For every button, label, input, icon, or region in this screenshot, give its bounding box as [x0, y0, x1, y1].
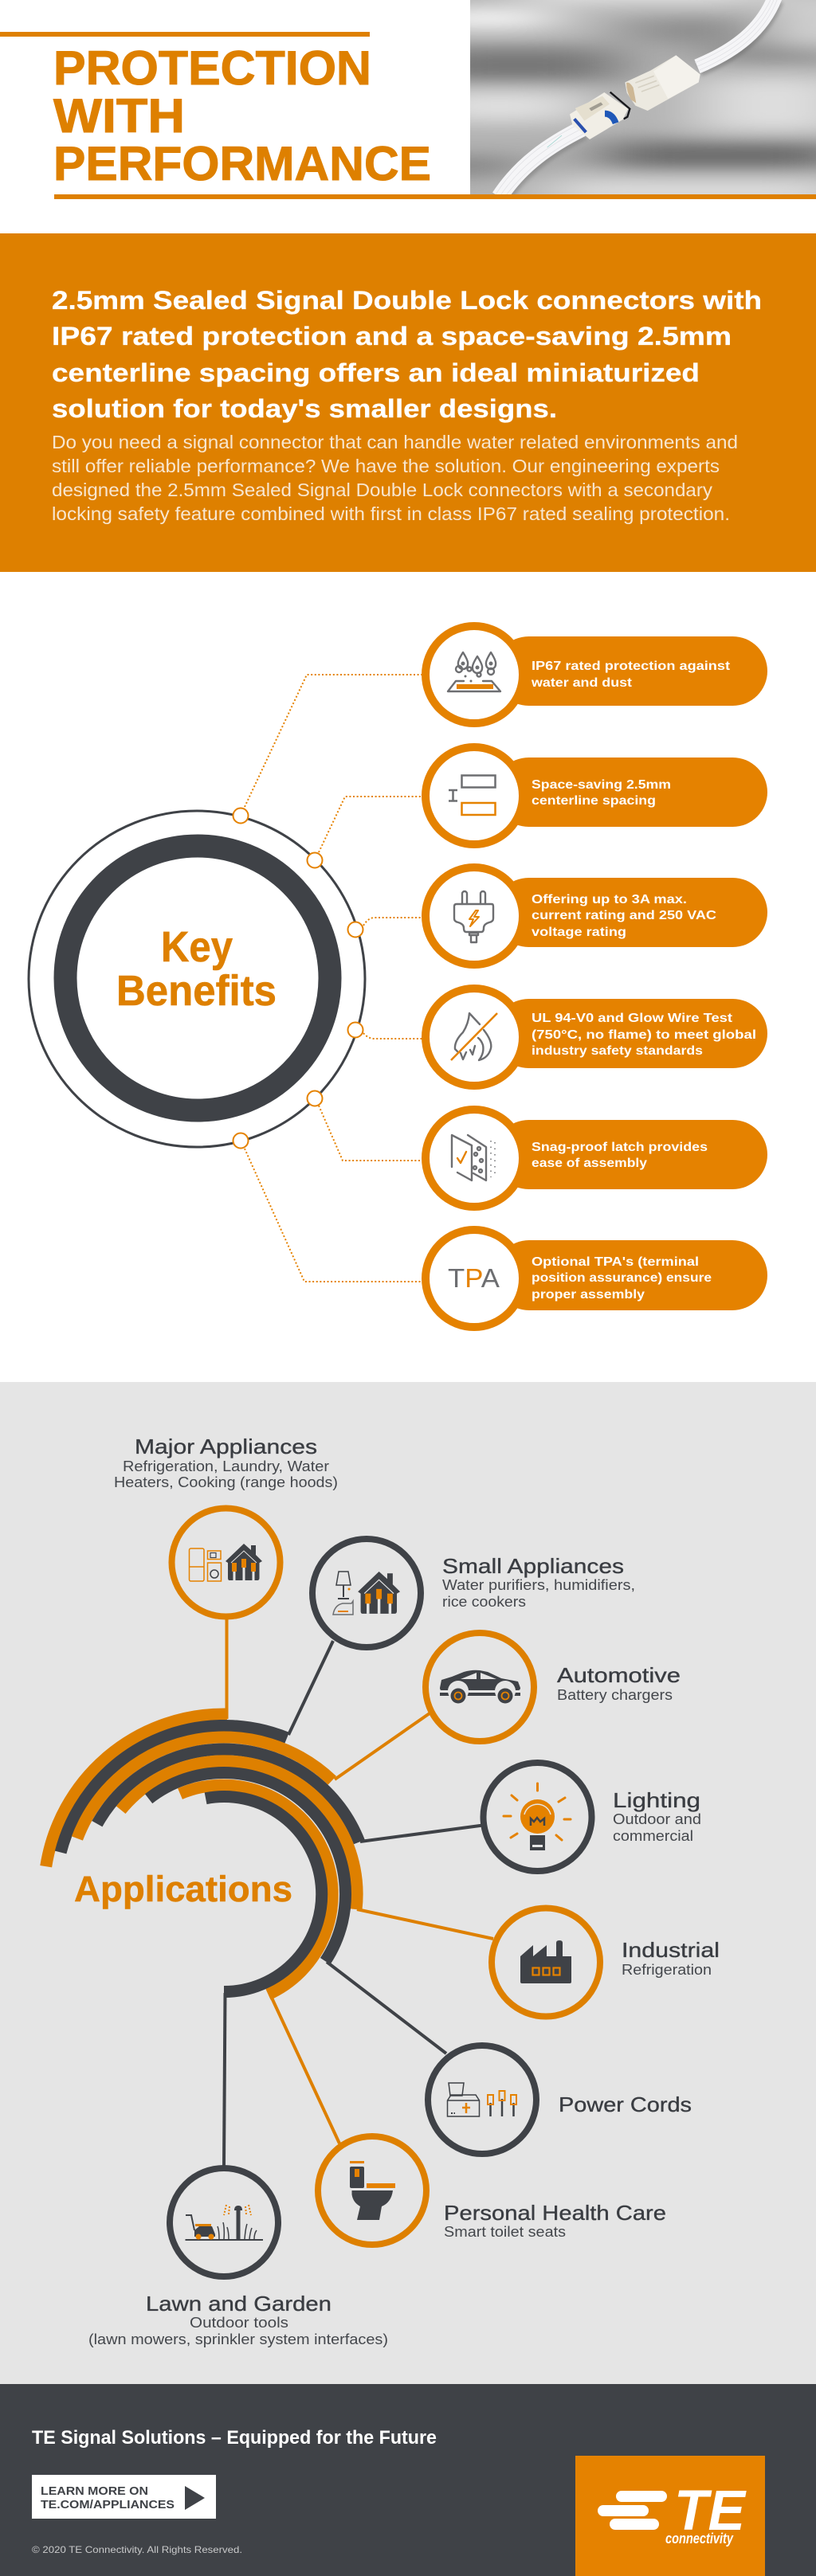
icon: no flame: [451, 1013, 497, 1060]
call to action button: TE.COM/APPLIANCES: [41, 2499, 175, 2511]
application text: Lighting: [613, 1788, 700, 1812]
application text: commercial: [613, 1827, 693, 1844]
application text: Automotive: [557, 1663, 681, 1687]
icon: plug: [454, 891, 493, 942]
application text: Lawn and Garden: [146, 2292, 332, 2316]
benefit: snag-proof latch: [426, 1110, 767, 1207]
benefit text: water and dust: [531, 676, 633, 690]
benefit: TPA: [426, 1230, 767, 1327]
concentric arcs: [46, 1714, 359, 1995]
title: WITH: [53, 89, 185, 143]
panel: key benefits: [0, 572, 816, 1382]
benefit text: position assurance) ensure: [532, 1271, 712, 1285]
icon: factory: [520, 1940, 571, 1983]
icon: light bulb: [504, 1783, 571, 1850]
benefit: flame rating: [426, 989, 767, 1086]
title: [53, 41, 431, 190]
copyright: © 2020 TE Connectivity. All Rights Reserved.: [32, 2544, 242, 2555]
benefit text: current rating and 250 VAC: [532, 909, 716, 922]
intro heading: solution for today's smaller designs.: [52, 394, 557, 423]
benefit: spacing: [426, 747, 767, 844]
benefit text: Snag-proof latch provides: [532, 1141, 708, 1154]
benefit text: Space-saving 2.5mm: [532, 778, 671, 792]
application text: Water purifiers, humidifiers,: [442, 1576, 635, 1593]
application: automotive: [426, 1633, 681, 1741]
intro heading: 2.5mm Sealed Signal Double Lock connectors with: [52, 286, 762, 315]
application text: Outdoor and: [613, 1811, 701, 1827]
call to action button: LEARN MORE ON: [41, 2485, 148, 2498]
application text: Battery chargers: [557, 1686, 673, 1703]
icon: water and dust: [448, 652, 500, 691]
application: small appliances: [312, 1539, 635, 1647]
icon: latch panels: [452, 1135, 495, 1180]
benefit text: [532, 1141, 708, 1170]
intro body text: [52, 432, 738, 524]
icon: TPA lettering: TPA: [448, 1263, 500, 1293]
title: PERFORMANCE: [53, 137, 431, 190]
benefit text: [532, 778, 671, 808]
panel: page header: [0, 0, 816, 233]
benefit text: voltage rating: [532, 926, 626, 939]
heading: key benefits: [116, 923, 277, 1015]
intro body text: locking safety feature combined with first in class IP67 rated sealing protection.: [52, 503, 730, 524]
benefit text: [531, 660, 731, 690]
benefit text: [532, 1255, 712, 1302]
logo: TE Connectivity: TE: [674, 2480, 747, 2543]
application text: Heaters, Cooking (range hoods): [114, 1474, 338, 1490]
application text: Power Cords: [559, 2093, 692, 2116]
application text: Personal Health Care: [444, 2201, 666, 2225]
application text: Small Appliances: [442, 1554, 624, 1578]
icon: arrow: [185, 2486, 205, 2510]
heading: applications: Applications: [74, 1869, 292, 1909]
icon: box and cords: [448, 2083, 516, 2116]
application text: [444, 2201, 666, 2240]
icon: mower and sprinkler: [185, 2205, 263, 2240]
benefit text: Optional TPA's (terminal: [532, 1255, 699, 1269]
icon: lamp, iron and house: [333, 1572, 400, 1615]
application text: [613, 1788, 701, 1844]
dotted connector lines: [245, 675, 424, 1282]
application text: [557, 1663, 681, 1703]
icon: appliances and house: [190, 1544, 262, 1581]
intro heading: [52, 286, 762, 423]
application: lighting: [483, 1763, 701, 1871]
benefit text: [532, 893, 716, 939]
application: major appliances: [114, 1435, 338, 1617]
benefit text: industry safety standards: [532, 1044, 703, 1058]
application text: Refrigeration, Laundry, Water: [123, 1458, 329, 1474]
benefit text: IP67 rated protection against: [532, 660, 731, 673]
benefit text: Offering up to 3A max.: [532, 893, 687, 906]
application: industrial: [492, 1909, 720, 2017]
panel: footer: [0, 2384, 816, 2576]
photo: connector pair: [417, 0, 816, 207]
footer heading: TE Signal Solutions – Equipped for the Future: [32, 2427, 437, 2449]
header top rule: [0, 32, 370, 37]
benefit text: UL 94-V0 and Glow Wire Test: [532, 1012, 733, 1025]
application text: [114, 1435, 338, 1490]
benefit: IP67: [426, 626, 767, 723]
benefit: current rating: [426, 867, 767, 965]
female housing: [610, 92, 630, 119]
logo: TE Connectivity: connectivity: [665, 2531, 734, 2547]
intro heading: IP67 rated protection and a space-saving 2.5mm: [52, 322, 732, 350]
application text: [442, 1554, 635, 1610]
benefits ring diagram: [29, 808, 365, 1149]
benefit text: [532, 1012, 756, 1058]
application: personal health care: [318, 2136, 666, 2245]
intro body text: still offer reliable performance? We have the solution. Our engineering experts: [52, 456, 720, 476]
application text: Smart toilet seats: [444, 2223, 566, 2240]
heading: key benefits: Key: [161, 923, 233, 971]
male housing: [625, 55, 700, 111]
application text: Outdoor tools: [190, 2314, 288, 2331]
title: PROTECTION: [53, 41, 371, 95]
benefit text: centerline spacing: [532, 794, 656, 808]
heading: key benefits: Benefits: [116, 967, 277, 1015]
icon: centerline spacing: [449, 776, 496, 815]
logo: TE Connectivity: [575, 2456, 765, 2576]
application text: (lawn mowers, sprinkler system interfaces): [88, 2331, 388, 2347]
application text: [622, 1938, 720, 1978]
application text: [88, 2292, 388, 2347]
intro body text: Do you need a signal connector that can handle water related environments and: [52, 432, 738, 452]
benefit text: proper assembly: [532, 1288, 645, 1302]
benefit text: (750°C, no flame) to meet global: [532, 1028, 756, 1042]
icon: toilet: [350, 2161, 395, 2220]
application text: Major Appliances: [135, 1435, 317, 1458]
panel: applications: [0, 1382, 816, 2384]
connector lines: [224, 1617, 493, 2167]
application text: Industrial: [622, 1938, 720, 1962]
intro body text: designed the 2.5mm Sealed Signal Double Lock connectors with a secondary: [52, 480, 713, 500]
benefit text: ease of assembly: [532, 1157, 647, 1170]
panel: introduction: [0, 233, 816, 572]
intro heading: centerline spacing offers an ideal miniaturized: [52, 358, 700, 387]
application text: rice cookers: [442, 1593, 526, 1610]
application: lawn and garden: [88, 2168, 388, 2347]
application text: Refrigeration: [622, 1961, 712, 1978]
header bottom rule: [54, 194, 816, 199]
call to action button: [32, 2475, 216, 2519]
application: power cords: [428, 2046, 692, 2154]
icon: car: [440, 1670, 520, 1703]
